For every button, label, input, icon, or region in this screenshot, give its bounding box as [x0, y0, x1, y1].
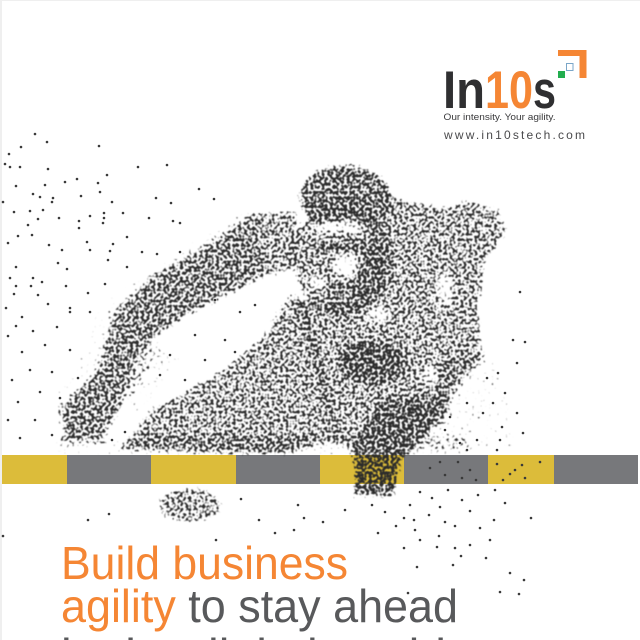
logo tagline: Our intensity. Your agility. — [444, 112, 556, 123]
mouth — [323, 284, 367, 294]
stippled hurdler figure — [50, 163, 520, 524]
hair — [297, 163, 393, 231]
particle halo: above bar — [55, 435, 470, 458]
hurdle bar — [2, 455, 638, 484]
face — [292, 200, 392, 316]
particle halo: arm and torso gap, lower part — [122, 343, 176, 413]
headline line 2: agility to stay ahead — [61, 580, 458, 632]
headline — [61, 537, 458, 640]
clump under bar — [156, 486, 224, 524]
shoulder and right arm — [295, 192, 509, 455]
logo wordmark: s — [533, 61, 556, 120]
logo wordmark: 10 — [485, 61, 533, 120]
logo — [443, 50, 586, 142]
knee dense patch — [338, 340, 406, 384]
logo wordmark — [443, 61, 556, 120]
logo icon: orange bracket with squares — [558, 50, 586, 78]
torso and trailing leg — [118, 290, 340, 456]
website address: www.in10stech.com — [443, 128, 585, 142]
left arm — [58, 210, 300, 444]
particle halo: right and lower edge — [420, 350, 520, 452]
logo wordmark: In — [443, 61, 485, 120]
eye line — [312, 242, 372, 252]
particle halo: outskirts of arm — [50, 205, 265, 450]
headline line 1: Build business — [61, 537, 348, 589]
scattered particles — [3, 134, 540, 594]
lead foot over bar — [352, 398, 446, 498]
